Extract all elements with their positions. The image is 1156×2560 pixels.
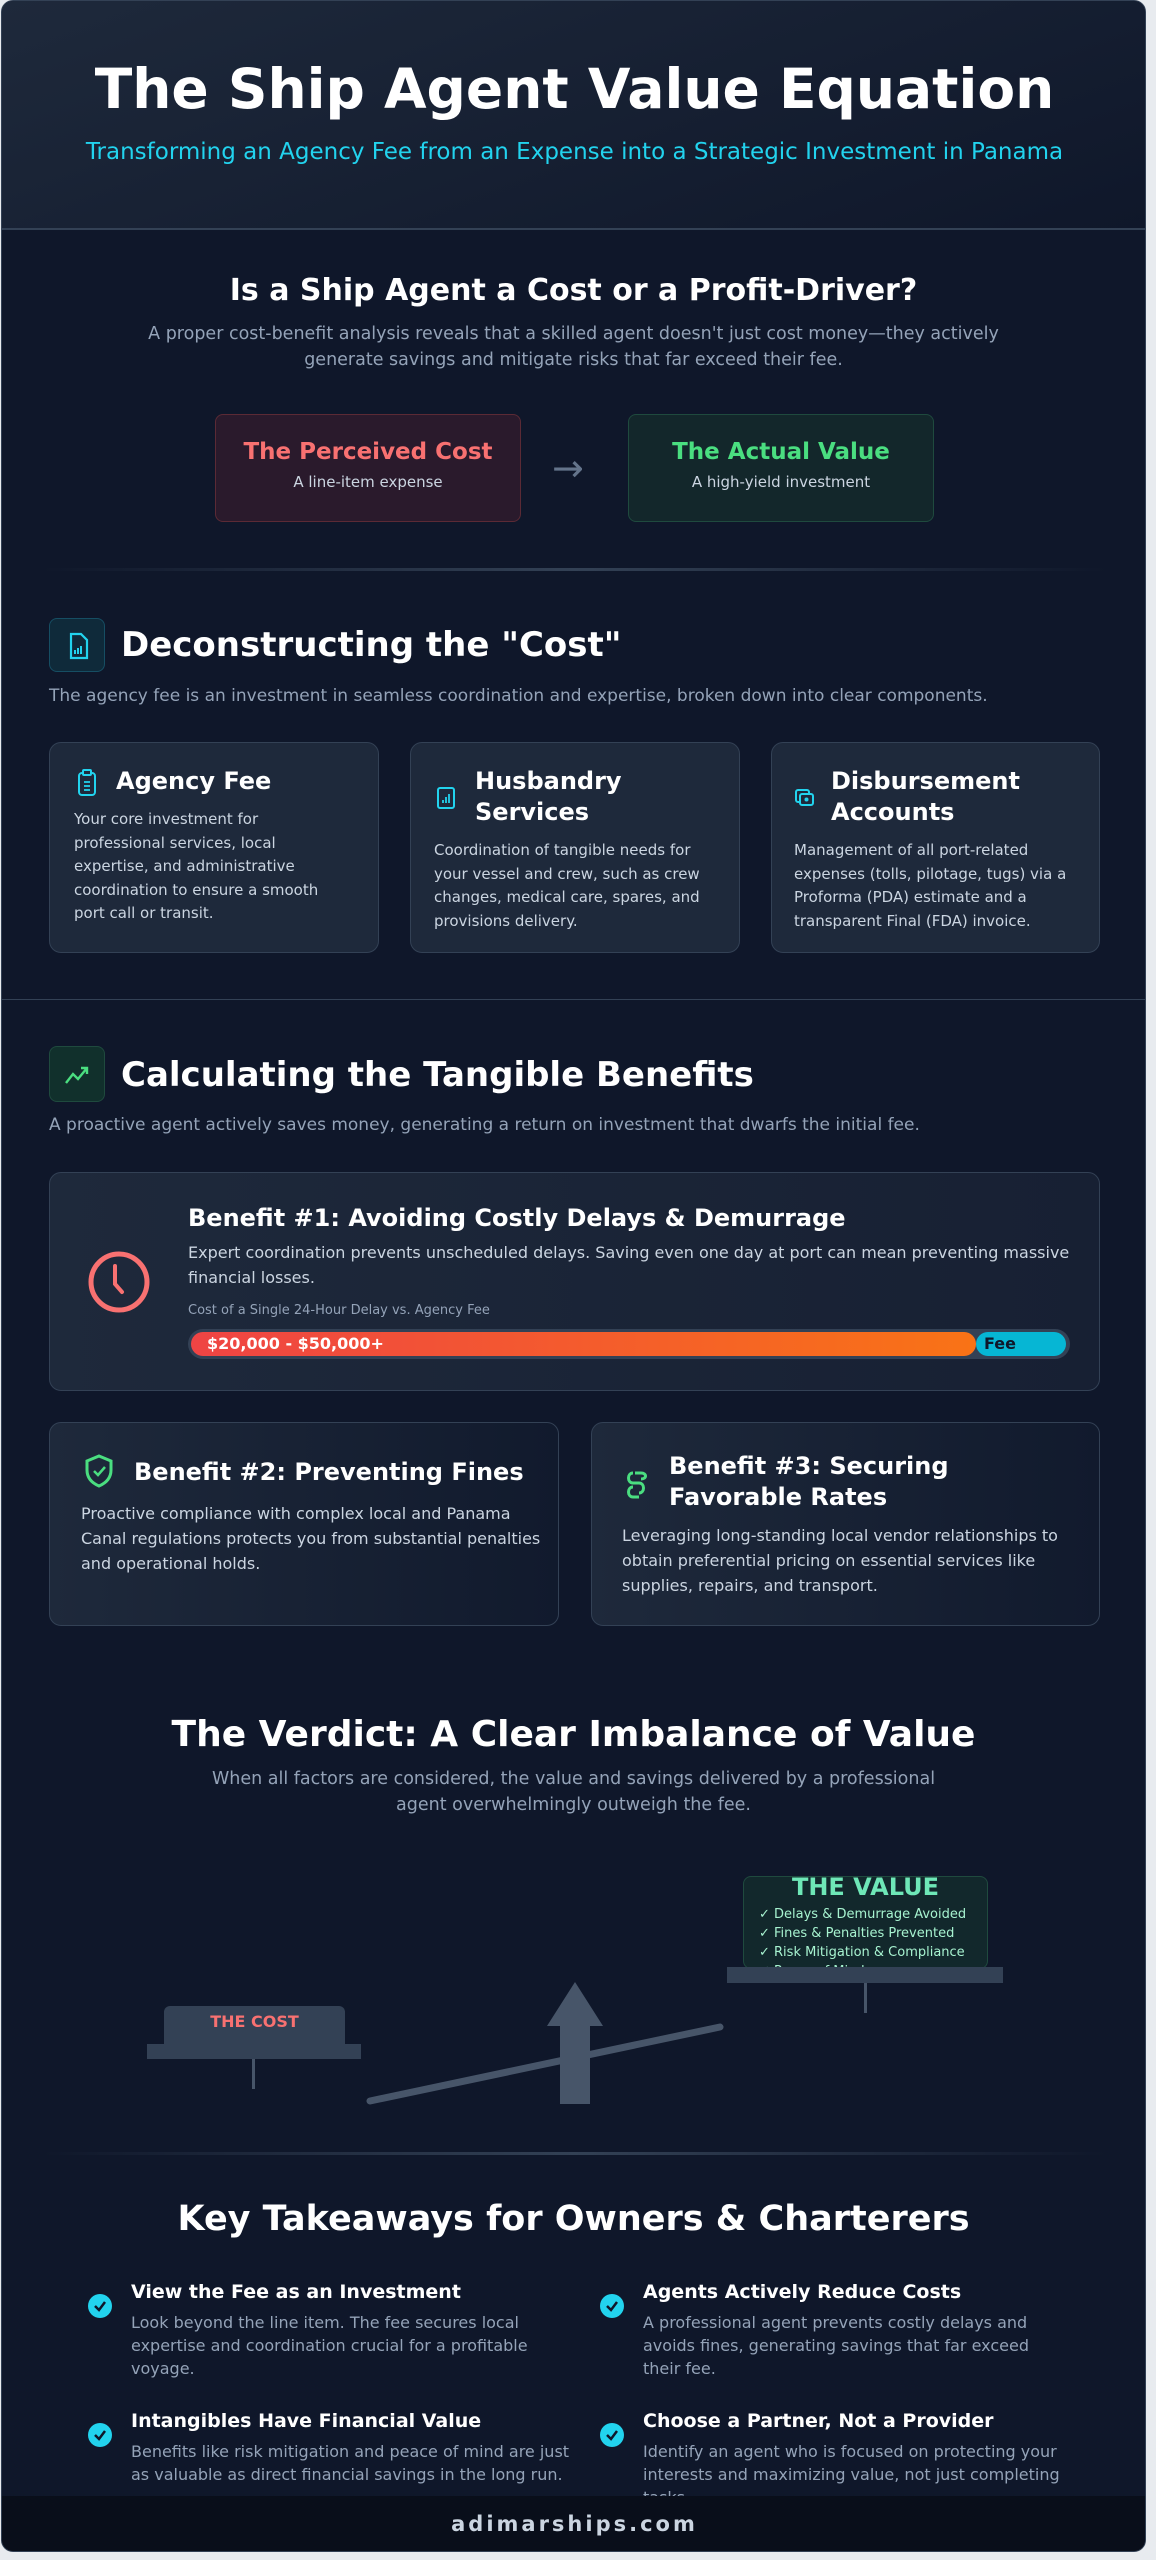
box: perceived cost: A line-item expense: [293, 473, 443, 491]
box: actual value: A high-yield investment: [692, 473, 870, 491]
card: husbandry: [410, 742, 740, 953]
box: perceived cost: [215, 414, 521, 522]
icon: trending: [49, 1046, 105, 1102]
card: benefit 3: Leveraging long-standing local vendor relationships to obtain preferential pricing on essential services like supplies, repairs, and transport.: [622, 1526, 1058, 1595]
card: benefit 3: Favorable Rates: [669, 1483, 887, 1511]
takeaway 4: Choose a Partner, Not a Provider: [643, 2410, 994, 2432]
card: husbandry: Husbandry: [475, 767, 622, 795]
beam and pivot: [366, 1982, 724, 2104]
card: agency fee: [49, 742, 379, 953]
takeaway 1: View the Fee as an Investment: [131, 2281, 461, 2303]
card: benefit 2: Benefit #2: Preventing Fines: [134, 1458, 524, 1486]
card: benefit 3: [591, 1422, 1100, 1626]
bar chart: delay vs fee: Fee: [984, 1334, 1016, 1353]
value pan: ✓ Delays & Demurrage Avoided: [759, 1907, 966, 1922]
section subtitle: A proactive agent actively saves money, generating a return on investment that dwarfs the initial fee.: [49, 1115, 920, 1135]
card: benefit 1: Cost of a Single 24-Hour Delay vs. Agency Fee: [188, 1303, 490, 1318]
box: actual value: The Actual Value: [672, 439, 890, 465]
card: husbandry: Services: [475, 798, 589, 826]
icon: shield: [86, 1454, 112, 1488]
takeaways list: [88, 2281, 1060, 2507]
icon: clock: [88, 1252, 150, 1312]
card: disbursement: Management of all port-related expenses (tolls, pilotage, tugs) via a Proforma (PDA) estimate and a transparent Final (FDA) invoice.: [794, 841, 1066, 930]
takeaway 1: [88, 2281, 528, 2378]
subtitle: Transforming an Agency Fee from an Expense into a Strategic Investment in Panama: [86, 139, 1063, 165]
takeaway 3: Intangibles Have Financial Value: [131, 2410, 481, 2432]
cost pan: [147, 2006, 361, 2089]
section subtitle: The agency fee is an investment in seamless coordination and expertise, broken down into clear components.: [49, 686, 988, 706]
heading: verdict: The Verdict: A Clear Imbalance of Value: [172, 1714, 975, 1755]
scale graphic: [147, 1876, 1003, 2104]
takeaway 2: A professional agent prevents costly delays and avoids fines, generating savings that far exceed their fee.: [643, 2313, 1029, 2378]
card: benefit 1: Expert coordination prevents unscheduled delays. Saving even one day at port can mean preventing massive financial losses.: [188, 1243, 1069, 1287]
icon: clipboard: [78, 769, 96, 796]
takeaway 3: [88, 2410, 569, 2484]
header: [2, 1, 1147, 230]
card: benefit 1: Benefit #1: Avoiding Costly Delays & Demurrage: [188, 1204, 846, 1232]
box: perceived cost: The Perceived Cost: [243, 439, 492, 465]
cost pan: THE COST: [210, 2012, 299, 2031]
card: agency fee: Your core investment for professional services, local expertise, and administrative coordination to ensure a smooth port call or transit.: [74, 810, 318, 922]
value pan: [727, 1876, 1003, 2013]
intro text: A proper cost-benefit analysis reveals that a skilled agent doesn't just cost money—they actively generate savings and mitigate risks that far exceed their fee.: [148, 324, 999, 370]
takeaway 2: Agents Actively Reduce Costs: [643, 2281, 961, 2303]
icon: document: [49, 618, 105, 672]
heading: calculating: Calculating the Tangible Benefits: [121, 1055, 754, 1095]
takeaway 3: Benefits like risk mitigation and peace of mind are just as valuable as direct financial savings in the long run.: [131, 2442, 569, 2484]
section heading: cost or profit: Is a Ship Agent a Cost or a Profit-Driver?: [230, 273, 917, 308]
footer: [2, 2496, 1147, 2553]
bar chart: delay vs fee: [188, 1329, 1070, 1359]
icon: money: [795, 789, 814, 806]
heading: deconstructing: Deconstructing the "Cost": [121, 625, 622, 665]
card: disbursement: Disbursement: [831, 767, 1020, 795]
icon: link: [627, 1472, 647, 1498]
title: The Ship Agent Value Equation: [95, 57, 1054, 121]
card: disbursement: Accounts: [831, 798, 954, 826]
icon: chart file: [437, 787, 455, 809]
takeaway 2: [600, 2281, 1029, 2378]
arrow: →: [552, 446, 584, 490]
card: benefit 2: [49, 1422, 559, 1626]
value pan: ✓ Risk Mitigation & Compliance: [759, 1945, 965, 1960]
verdict text: When all factors are considered, the value and savings delivered by a professional agent overwhelmingly outweigh the fee.: [212, 1769, 935, 1815]
value pan: ✓ Fines & Penalties Prevented: [759, 1926, 954, 1941]
card: disbursement: [771, 742, 1100, 953]
card: benefit 1: [49, 1172, 1100, 1391]
box: actual value: [628, 414, 934, 522]
card: agency fee: Agency Fee: [116, 767, 271, 795]
takeaway 4: [600, 2410, 1060, 2507]
card: husbandry: Coordination of tangible needs for your vessel and crew, such as crew changes, medical care, spares, and provisions delivery.: [434, 841, 700, 930]
takeaway 4: Identify an agent who is focused on protecting your interests and maximizing value, not just completing tasks.: [643, 2442, 1060, 2507]
footer: adimarships.com: [451, 2512, 698, 2536]
takeaway 1: Look beyond the line item. The fee secures local expertise and coordination crucial for a profitable voyage.: [131, 2313, 528, 2378]
bar chart: delay vs fee: $20,000 - $50,000+: [207, 1334, 384, 1353]
heading: key takeaways: Key Takeaways for Owners & Charterers: [177, 2199, 970, 2239]
card: benefit 2: Proactive compliance with complex local and Panama Canal regulations protects you from substantial penalties and operational holds.: [81, 1504, 540, 1573]
card: benefit 3: Benefit #3: Securing: [669, 1452, 949, 1480]
